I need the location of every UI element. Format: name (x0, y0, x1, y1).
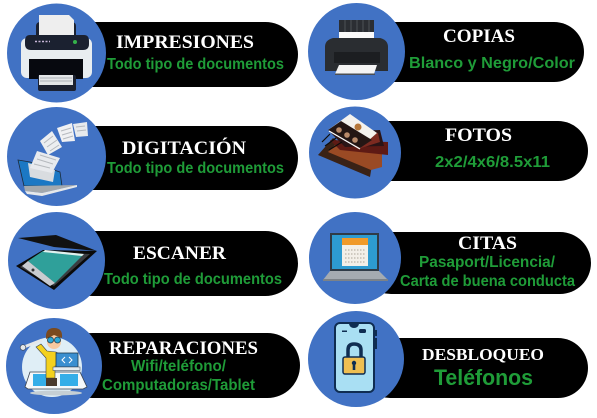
circle (7, 4, 106, 102)
heading: DESBLOQUEO (422, 345, 544, 364)
panel: reparaciones (6, 318, 300, 414)
heading: CITAS (458, 233, 517, 254)
icon: technician repairing devices (20, 328, 87, 397)
circle (308, 311, 404, 407)
pill (60, 22, 298, 87)
icon: phone with padlock (335, 323, 377, 392)
circle (309, 106, 401, 198)
subtitle: Teléfonos (434, 365, 533, 390)
icon: flatbed scanner (16, 235, 97, 290)
pill (60, 333, 300, 398)
pill (360, 232, 591, 294)
subtitle line 2: Computadoras/Tablet (102, 377, 255, 394)
pill (360, 338, 588, 398)
panel: digitacion (7, 107, 298, 206)
subtitle line 2: Carta de buena conducta (400, 273, 575, 290)
subtitle: Todo tipo de documentos (107, 160, 284, 177)
icon: inkjet printer (325, 20, 388, 75)
heading: ESCANER (133, 243, 226, 264)
panel: copias (308, 3, 584, 100)
heading: DIGITACIÓN (122, 137, 246, 159)
subtitle: 2x2/4x6/8.5x11 (435, 154, 550, 171)
subtitle: Todo tipo de documentos (104, 271, 282, 288)
pill (360, 121, 588, 181)
subtitle: Blanco y Negro/Color (409, 55, 575, 72)
circle (309, 212, 401, 304)
pill (60, 231, 298, 296)
icon: office printer (21, 15, 92, 91)
panel: escaner (8, 212, 298, 309)
panel: impresiones (7, 4, 298, 102)
icon: laptop with calendar (323, 233, 388, 281)
circle (6, 318, 102, 414)
subtitle line 1: Wifi/teléfono/ (131, 358, 227, 375)
panel: desbloqueo (308, 311, 588, 407)
heading: REPARACIONES (109, 338, 258, 359)
icon: laptop with flying pages (18, 122, 88, 196)
icon: photo stack (318, 114, 388, 177)
circle (308, 3, 405, 100)
heading: COPIAS (443, 26, 515, 47)
panel: citas (309, 212, 591, 304)
circle (8, 212, 105, 309)
pill (60, 126, 298, 190)
circle (7, 107, 106, 206)
subtitle: Todo tipo de documentos (107, 56, 284, 73)
subtitle line 1: Pasaport/Licencia/ (419, 254, 556, 271)
heading: FOTOS (445, 125, 512, 146)
panel: fotos (309, 106, 588, 198)
heading: IMPRESIONES (116, 32, 254, 53)
pill (360, 22, 584, 82)
